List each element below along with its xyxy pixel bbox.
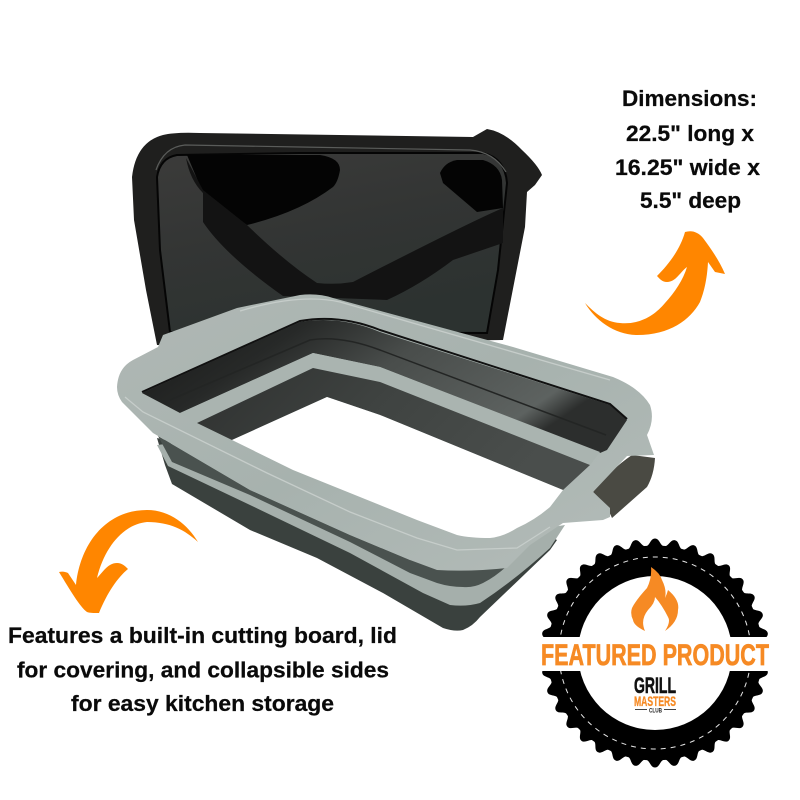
lid reflection right xyxy=(440,160,503,212)
grill masters club logo xyxy=(634,673,676,714)
lid reflection left xyxy=(187,155,340,225)
badge: featured product xyxy=(530,530,780,776)
middle rim xyxy=(180,353,600,465)
arrow: pointing up to dimensions xyxy=(585,231,725,335)
white ribbon band xyxy=(530,637,780,671)
grill masters club logo: MASTERS xyxy=(634,694,676,709)
centre opening xyxy=(232,397,563,538)
lid bottom-left shadow xyxy=(174,309,240,335)
wall groove line xyxy=(170,339,606,435)
text block: features xyxy=(8,623,397,716)
rim highlight xyxy=(125,299,610,550)
text block: features: Features a built-in cutting board, lid xyxy=(8,623,397,648)
product photo: lid behind basin xyxy=(132,129,542,345)
text block: dimensions: 22.5" long x xyxy=(626,121,754,146)
basin lower body xyxy=(157,438,557,631)
lower light band xyxy=(157,440,565,606)
scalloped seal xyxy=(532,530,778,776)
product photo: collapsible basin xyxy=(117,294,655,631)
text block: features: for easy kitchen storage xyxy=(71,691,334,716)
text block: dimensions xyxy=(615,86,760,213)
text block: features: for covering, and collapsible sides xyxy=(17,658,389,682)
lid strap reflection xyxy=(186,158,503,300)
text block: dimensions: 16.25" wide x xyxy=(615,155,760,180)
lid highlight line xyxy=(156,145,506,172)
grip handle xyxy=(593,455,655,518)
text block: dimensions: Dimensions: xyxy=(622,86,757,111)
lid inner panel xyxy=(157,153,507,333)
wall top dark line xyxy=(142,319,627,419)
lid outer shell xyxy=(132,129,542,345)
outer rim xyxy=(117,294,654,571)
grill masters club logo: CLUB xyxy=(649,708,662,714)
upper inner wall xyxy=(142,320,627,453)
dark band under rim xyxy=(158,436,507,587)
text block: dimensions: 5.5" deep xyxy=(640,188,741,213)
arrow: pointing down to features xyxy=(59,510,198,613)
grill masters club logo: GRILL xyxy=(634,673,676,698)
lower inner wall xyxy=(197,368,590,490)
flame icon xyxy=(631,567,678,631)
